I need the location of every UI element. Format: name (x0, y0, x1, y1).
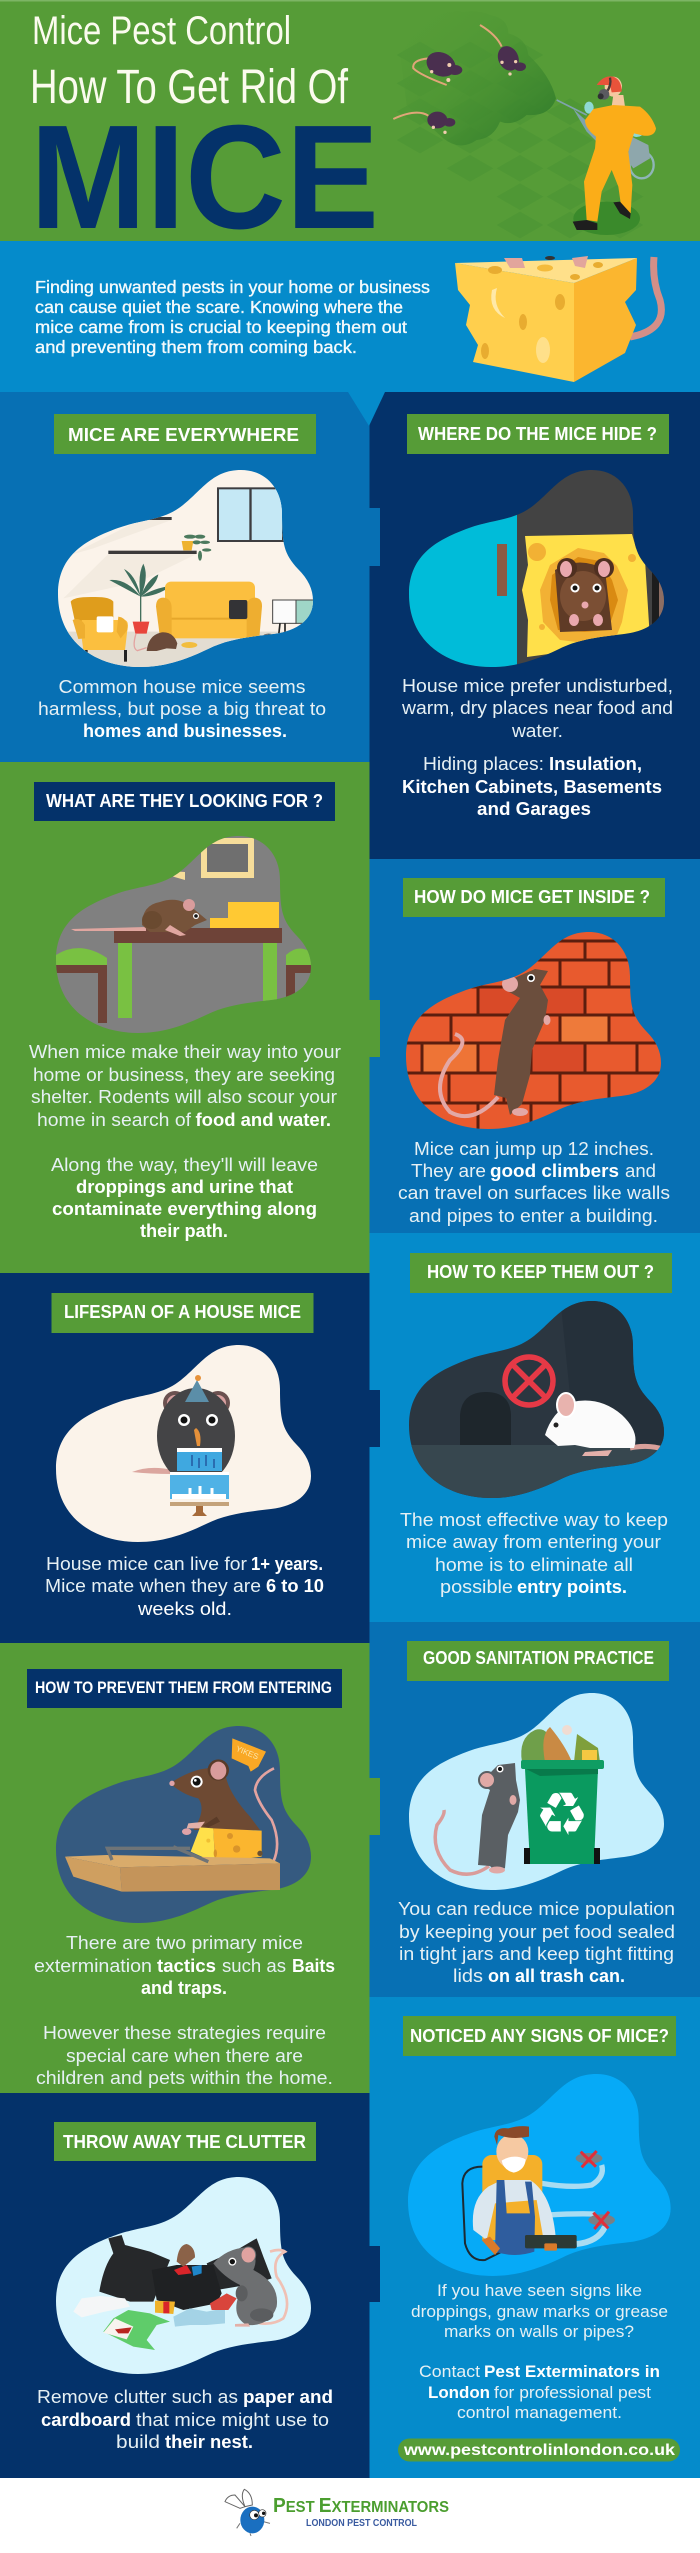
panel: intro (0, 241, 700, 426)
text: where do the mice hide: water. (511, 721, 563, 741)
text: how to prevent them from entering: There are two primary mice (66, 1933, 303, 1953)
text: how to keep them out (400, 1510, 668, 1597)
text: good sanitation practice: lids (453, 1966, 483, 1986)
text: lifespan of a house mice (45, 1554, 324, 1619)
text: noticed any signs of mice: droppings, gnaw marks or grease (411, 2302, 668, 2321)
title line: How To Get Rid Of: How To Get Rid Of (30, 61, 349, 114)
icon: crossed out pest one (576, 2151, 602, 2167)
text: good sanitation practice: You can reduce mice population (398, 1899, 675, 1919)
text: lifespan of a house mice: 1+ years. (251, 1554, 323, 1574)
heading: how to prevent them from entering: HOW TO PREVENT THEM FROM ENTERING (35, 1679, 332, 1697)
panel: lifespan of a house mice (0, 1273, 380, 1643)
text: where do the mice hide: Kitchen Cabinets, Basements (402, 777, 662, 797)
exterminator figure (557, 76, 656, 230)
icon: blue fly (225, 2489, 270, 2536)
text: noticed any signs of mice (411, 2281, 668, 2422)
text: what are they looking for: their path. (140, 1221, 228, 1241)
text: how do mice get inside: and (625, 1161, 656, 1181)
text: mice are everywhere: homes and businesses. (83, 721, 287, 741)
text: mice are everywhere (38, 677, 326, 741)
text: lifespan of a house mice: Mice mate when they are (45, 1576, 261, 1596)
text: what are they looking for: Along the way, they'll will leave (51, 1155, 318, 1175)
intro text: Finding unwanted pests in your home or business (35, 277, 430, 297)
text: throw away the clutter (37, 2387, 333, 2452)
panel: where do the mice hide (370, 392, 700, 859)
text: how to keep them out: The most effective way to keep (400, 1510, 668, 1530)
text: how to keep them out: home is to eliminate all (435, 1555, 633, 1575)
panel: how to keep them out (370, 1233, 700, 1622)
text: good sanitation practice: on all trash can. (488, 1966, 625, 1986)
text: how to prevent them from entering: extermination (34, 1956, 152, 1976)
text: lifespan of a house mice: House mice can live for (46, 1554, 247, 1574)
heading: lifespan of a house mice (52, 1293, 314, 1333)
text: noticed any signs of mice: If you have seen signs like (437, 2281, 642, 2300)
intro text (35, 277, 430, 357)
text: how to keep them out: entry points. (517, 1577, 627, 1597)
rat one (413, 47, 462, 85)
heading: mice are everywhere (54, 414, 316, 454)
panel: what are they looking for (0, 762, 380, 1273)
text: how to prevent them from entering: Baits (292, 1956, 335, 1976)
illustration: mouse in cheese hole (405, 465, 670, 670)
text: what are they looking for: home in search of (37, 1110, 192, 1130)
heading: how to keep them out: HOW TO KEEP THEM OUT ? (427, 1261, 654, 1282)
rat three (393, 112, 455, 134)
text: where do the mice hide: and Garages (477, 799, 591, 819)
text: lifespan of a house mice: weeks old. (137, 1599, 232, 1619)
text: what are they looking for: shelter. Rodents will also scour your (31, 1087, 337, 1107)
illustration: cheese with hiding mouse (455, 256, 661, 382)
text: noticed any signs of mice: London (428, 2383, 490, 2402)
illustration: exterminator spraying rats (393, 11, 656, 238)
text: how to prevent them from entering: special care when there are (66, 2046, 303, 2066)
heading: mice are everywhere: MICE ARE EVERYWHERE (68, 424, 299, 445)
intro text: and preventing them from coming back. (35, 337, 357, 357)
text: how do mice get inside (398, 1139, 670, 1226)
text: mice are everywhere: harmless, but pose a big threat to (38, 699, 326, 719)
text: what are they looking for (29, 1042, 341, 1241)
panel: noticed any signs of mice (370, 1997, 700, 2478)
heading: what are they looking for: WHAT ARE THEY LOOKING FOR ? (46, 790, 323, 811)
text: what are they looking for: home or business, they are seeking (33, 1065, 335, 1085)
text: how do mice get inside: good climbers (490, 1161, 619, 1181)
icon: recycling symbol: ♻ (535, 1780, 589, 1850)
illustration: living room with mouse (50, 465, 320, 670)
text: good sanitation practice: by keeping your pet food sealed (399, 1922, 675, 1942)
illustration: rubbish bags with mouse (56, 2177, 311, 2374)
text: throw away the clutter: their nest. (165, 2432, 253, 2452)
text: how to prevent them from entering: and traps. (141, 1978, 227, 1998)
illustration: mouse on snap trap with cheese (56, 1726, 311, 1923)
heading: where do the mice hide: WHERE DO THE MICE HIDE ? (418, 423, 657, 444)
heading: lifespan of a house mice: LIFESPAN OF A HOUSE MICE (64, 1301, 301, 1322)
text: noticed any signs of mice: control management. (457, 2403, 622, 2422)
text: lifespan of a house mice: 6 to 10 (266, 1576, 324, 1596)
text: noticed any signs of mice: Pest Exterminators in (484, 2362, 660, 2381)
brand name: PEST EXTERMINATORS (273, 2495, 449, 2517)
heading: where do the mice hide (407, 414, 669, 454)
text: noticed any signs of mice: marks on walls or pipes? (444, 2322, 634, 2341)
text: noticed any signs of mice: Contact (419, 2362, 480, 2381)
icon: red prohibition mark (505, 1357, 553, 1405)
text: how to prevent them from entering: tactics (157, 1956, 216, 1976)
text: how to prevent them from entering: children and pets within the home. (36, 2068, 333, 2088)
illustration: mouse with birthday cake (56, 1345, 311, 1542)
panel: how to prevent them from entering (0, 1643, 380, 2093)
text: what are they looking for: droppings and urine that (76, 1177, 293, 1197)
intro text: mice came from is crucial to keeping them out (35, 317, 407, 337)
brand tagline: LONDON PEST CONTROL (306, 2517, 417, 2529)
heading: how do mice get inside (403, 878, 665, 917)
text: how to keep them out: possible (440, 1577, 513, 1597)
heading: throw away the clutter (54, 2122, 316, 2161)
text: throw away the clutter: cardboard (41, 2410, 131, 2430)
illustration: mouse and recycling bin (409, 1693, 664, 1890)
heading: throw away the clutter: THROW AWAY THE CLUTTER (63, 2131, 306, 2152)
panel: mice are everywhere (0, 392, 380, 762)
text: throw away the clutter: that mice might use to (136, 2410, 329, 2430)
speech bubble: yikes (232, 1738, 266, 1772)
heading: good sanitation practice: GOOD SANITATION PRACTICE (423, 1647, 654, 1668)
text: how to keep them out: mice away from entering your (406, 1532, 661, 1552)
rat two (480, 25, 526, 76)
text: mice are everywhere: Common house mice seems (58, 677, 306, 697)
heading: good sanitation practice (407, 1641, 669, 1681)
icon: crossed out pest two (588, 2212, 615, 2229)
text: good sanitation practice: in tight jars and keep tight fitting (399, 1944, 674, 1964)
text: what are they looking for: When mice make their way into your (29, 1042, 341, 1062)
website link pill: www.pestcontrolinlondon.co.uk (403, 2442, 675, 2459)
text: how do mice get inside: and pipes to enter a building. (409, 1206, 658, 1226)
heading: how do mice get inside: HOW DO MICE GET INSIDE ? (414, 886, 650, 907)
illustration: mouse climbing brick wall (406, 932, 661, 1129)
speech bubble: yikes: YIKES (235, 1744, 260, 1761)
text: throw away the clutter: paper and (243, 2387, 333, 2407)
heading: noticed any signs of mice (403, 2016, 676, 2056)
text: where do the mice hide: warm, dry places near food and (401, 698, 673, 718)
panel: how do mice get inside (370, 859, 700, 1233)
text: what are they looking for: food and water. (196, 1110, 331, 1130)
text: how to prevent them from entering: However these strategies require (43, 2023, 326, 2043)
text: how do mice get inside: They are (411, 1161, 486, 1181)
intro text: can cause quiet the scare. Knowing where the (35, 297, 403, 317)
illustration: mouse eating cheese on table (50, 830, 320, 1035)
heading: noticed any signs of mice: NOTICED ANY SIGNS OF MICE? (410, 2025, 669, 2046)
title line: Mice Pest Control: Mice Pest Control (32, 9, 291, 53)
illustration: white mouse and blocked entry (405, 1296, 670, 1501)
text: how to prevent them from entering: such as (222, 1956, 286, 1976)
text: throw away the clutter: build (116, 2432, 160, 2452)
panel: good sanitation practice (370, 1622, 700, 1997)
heading: how to prevent them from entering (27, 1669, 342, 1708)
title word: MICE: MICE (30, 95, 379, 260)
text: throw away the clutter: Remove clutter such as (37, 2387, 238, 2407)
heading: what are they looking for (34, 782, 335, 821)
footer logo (225, 2489, 449, 2536)
text: where do the mice hide: Insulation, (549, 754, 642, 774)
text: how to prevent them from entering (34, 1933, 335, 2088)
text: where do the mice hide (401, 676, 673, 819)
text: what are they looking for: contaminate everything along (52, 1199, 317, 1219)
panel: throw away the clutter (0, 2093, 380, 2478)
text: where do the mice hide: Hiding places: (423, 754, 544, 774)
website link pill (398, 2438, 680, 2462)
text: where do the mice hide: House mice prefer undisturbed, (402, 676, 673, 696)
text: noticed any signs of mice: for professional pest (494, 2383, 651, 2402)
text: good sanitation practice (398, 1899, 675, 1986)
text: how do mice get inside: can travel on surfaces like walls (398, 1183, 670, 1203)
heading: how to keep them out (410, 1253, 672, 1293)
illustration: exterminator with sprayer (408, 2074, 671, 2276)
text: how do mice get inside: Mice can jump up 12 inches. (414, 1139, 654, 1159)
